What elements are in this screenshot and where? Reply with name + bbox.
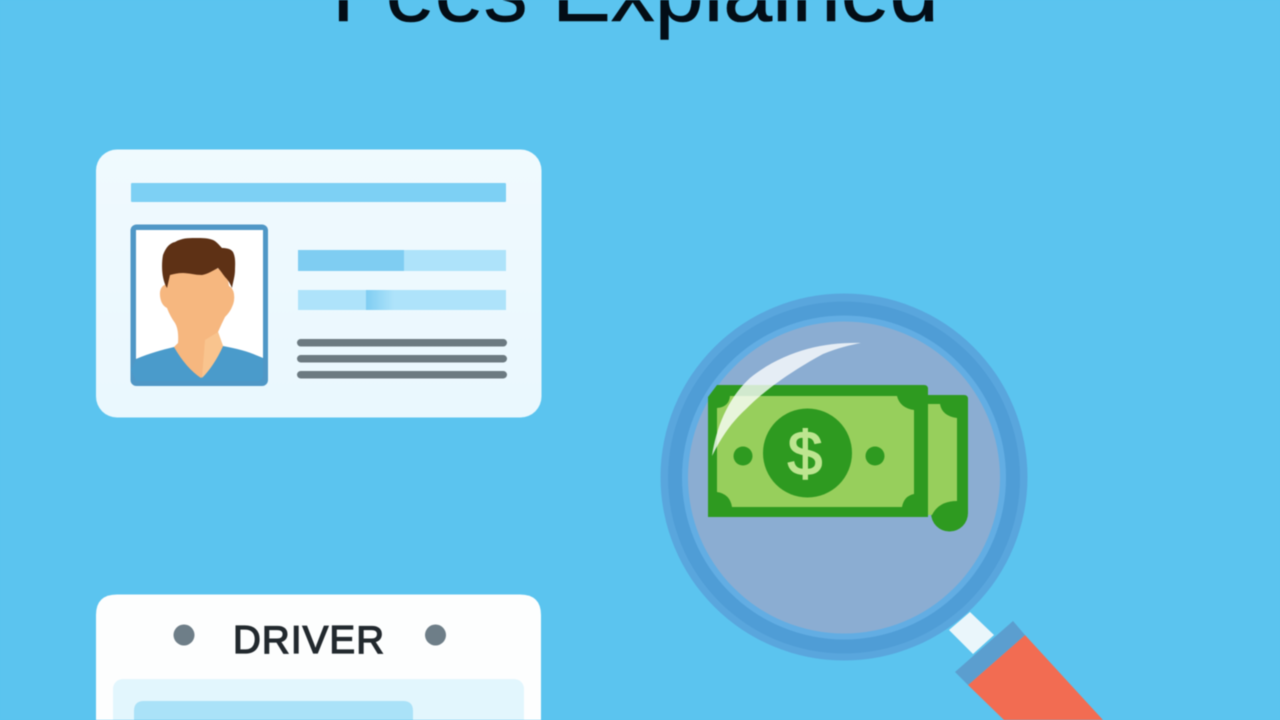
lens ring inner band xyxy=(682,316,1006,640)
left punch hole xyxy=(174,624,194,646)
panel: driver card xyxy=(96,594,541,720)
back banknote xyxy=(925,395,968,532)
card heading: DRIVER xyxy=(233,619,384,662)
front banknote xyxy=(708,385,928,517)
panel: ID card xyxy=(96,150,542,418)
right punch hole xyxy=(425,624,446,646)
info bar one xyxy=(298,250,506,271)
card body xyxy=(96,594,541,720)
lens ring darker band xyxy=(668,302,1020,654)
lens ring xyxy=(660,294,1028,660)
left dot xyxy=(734,446,752,466)
card body xyxy=(96,150,542,418)
ID photo xyxy=(130,224,268,386)
lens highlight xyxy=(712,343,861,456)
photo frame xyxy=(130,224,268,386)
lens glass xyxy=(688,322,1000,634)
photo background xyxy=(136,230,263,370)
handle grip xyxy=(968,635,1103,720)
shirt xyxy=(136,346,263,381)
card header bar xyxy=(131,183,506,202)
hair xyxy=(162,238,235,288)
info bar two xyxy=(298,290,506,310)
inner field xyxy=(134,701,413,720)
dollar medallion xyxy=(763,408,852,498)
handle connector xyxy=(949,612,994,654)
face and neck xyxy=(160,268,234,378)
inner panel xyxy=(113,679,524,720)
magnifier handle xyxy=(949,612,1103,720)
panel: magnifying glass over money xyxy=(660,294,1103,720)
handle collar xyxy=(955,621,1025,685)
neck highlight xyxy=(202,332,223,378)
right dot xyxy=(866,446,884,466)
text lines xyxy=(297,339,507,378)
banknote face xyxy=(717,396,914,507)
dollar sign: $ xyxy=(788,420,822,489)
